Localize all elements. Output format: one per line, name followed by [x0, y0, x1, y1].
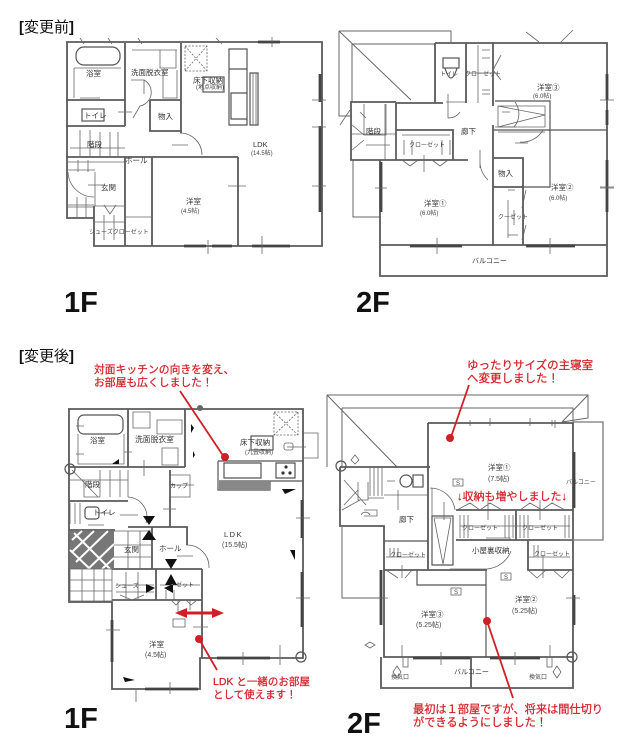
floor plan: after 1F: ーゼット — [170, 581, 194, 589]
floor plan: before 2F: クローゼット — [465, 70, 501, 78]
stairs — [342, 467, 384, 516]
floor plan: after 2F: 廊下 — [399, 514, 414, 524]
floor plan: after 1F: 階段 — [85, 479, 100, 489]
closets — [386, 500, 570, 578]
bath fittings — [74, 50, 177, 98]
closets — [402, 45, 545, 240]
floor plan: before 2F: バルコニー — [472, 257, 507, 265]
floor plan: before 1F: (14.5帖) — [251, 149, 273, 157]
walls — [68, 409, 303, 689]
floor label: before 2F: 2F — [356, 287, 390, 319]
hatched entry — [70, 531, 114, 569]
floor plan: after 2F: クローゼット — [390, 551, 426, 559]
floor plan: before 1F: 洋室 — [186, 196, 201, 206]
floor plan: before 2F: (6.0帖) — [420, 209, 438, 217]
stairs — [68, 130, 125, 218]
callout: master bedroom: へ変更しました！ — [467, 372, 559, 385]
walls — [66, 42, 322, 246]
floor plan: after 2F: 洋室② — [515, 594, 538, 604]
floor plan: after 2F: 小屋裏収納 — [472, 545, 510, 555]
callout: kitchen: 対面キッチンの向きを変え、 — [94, 362, 234, 376]
callout: master bedroom — [446, 358, 593, 442]
toilet — [82, 109, 104, 121]
closets — [116, 475, 200, 612]
doors — [68, 80, 202, 197]
under-floor storage — [185, 46, 207, 71]
windows — [184, 42, 320, 246]
floor plan: after 2F: 換気口 — [391, 673, 409, 681]
floor plan: after 1F: ホール — [159, 544, 182, 553]
floor plan: after 2F: バルコニー — [454, 668, 489, 676]
callout: LDK room: として使えます！ — [213, 688, 297, 701]
floor plan: after 2F: クローゼット — [534, 550, 570, 558]
floor plan: after 2F: S — [456, 481, 460, 487]
floor plan: before 1F: 洗面脱衣室 — [131, 67, 169, 77]
windows — [381, 452, 574, 658]
floor plan: before 1F: 玄関 — [101, 182, 116, 192]
kitchen counter — [229, 49, 258, 125]
heading: after: [変更後] — [19, 348, 74, 365]
callout: storage: ↓収納も増やしました↓ — [457, 489, 567, 503]
floor plan: before 2F: クローゼット — [409, 141, 445, 149]
floor plan: before 1F: ホール — [125, 156, 148, 165]
room labels: 洋室③ — [537, 82, 560, 92]
floor plan: before 2F: (6.0帖) — [549, 194, 567, 202]
floor plan: after 1F: カップ — [170, 483, 188, 490]
callout: partition — [413, 617, 603, 729]
toilet — [400, 475, 412, 487]
sink counter — [218, 461, 303, 490]
walls — [351, 43, 607, 276]
outside bump — [287, 433, 318, 458]
doors — [120, 497, 209, 568]
floor plan: after 1F: 玄関 — [124, 544, 139, 554]
callout: partition: ができるようにしました！ — [413, 715, 547, 729]
floor plan: before 2F — [339, 30, 614, 276]
floor plan: before 2F: 階段 — [366, 126, 381, 136]
floor label: before 1F: 1F — [64, 287, 98, 319]
floor plan: before 1F: LDK — [253, 140, 268, 149]
floor plan: before 1F: トイレ — [84, 111, 106, 120]
black triangle markers — [112, 424, 296, 682]
floor plan: after 1F: 洋室 — [149, 639, 164, 649]
windows — [112, 500, 302, 689]
wash and bath fittings — [78, 415, 123, 434]
floor plan: after 1F: (15.5帖) — [222, 540, 247, 549]
room labels: 洋室① — [488, 462, 511, 472]
toilet — [443, 58, 459, 68]
floor plan: after 1F: (九畳収納) — [245, 448, 273, 456]
floor plan: after 2F: (5.25帖) — [512, 606, 537, 615]
roof lines — [339, 31, 451, 217]
floor plan: after 2F: 洋室③ — [421, 609, 444, 619]
floor plan: after 1F: トイレ — [93, 508, 116, 517]
floor plan: after 2F — [327, 395, 603, 688]
floor plan: after 1F: (4.5帖) — [145, 650, 166, 659]
floor plan: after 2F: クローゼット — [522, 524, 558, 532]
floor plan: after 1F: シューズ — [115, 582, 139, 590]
floor plan: after 2F: (5.25帖) — [416, 620, 441, 629]
arrow: double-headed — [175, 608, 224, 618]
floor plan: before 2F: 洋室② — [551, 182, 574, 192]
floor plan: before 1F: シューズクローゼット — [89, 228, 149, 236]
room labels: 浴室 — [86, 68, 101, 78]
floor plan: after 2F: 換気口 — [529, 673, 547, 681]
floor plan: after 2F: (7.5帖) — [488, 474, 509, 483]
floor plan: before 1F — [66, 37, 326, 254]
floor plan: before 1F: 床下収納 — [193, 75, 223, 85]
under-floor storage — [274, 412, 298, 435]
floor plan: after 2F: バルコニー — [566, 479, 596, 486]
heading: before: [変更前] — [19, 19, 74, 36]
floor plan: before 2F: トイレ — [440, 72, 458, 78]
windows — [381, 74, 607, 246]
doors — [430, 488, 511, 569]
callout: LDK room — [195, 635, 310, 701]
floor plan: after 1F: 床下収納 — [240, 437, 270, 447]
floor plan: before 2F: 洋室① — [424, 198, 447, 208]
floor plan: before 1F: 物入 — [158, 111, 173, 121]
floor label: after 2F: 2F — [347, 708, 381, 740]
S boxes — [453, 479, 463, 486]
callout: kitchen: お部屋も広くしました！ — [94, 376, 213, 389]
floor plan: before 1F: 階段 — [87, 139, 102, 149]
floor plan: before 1F: (4.5帖) — [181, 207, 199, 215]
entry tiles — [70, 531, 152, 601]
callout: master bedroom: ゆったりサイズの主寝室 — [467, 358, 593, 372]
floor plan: before 2F: 廊下 — [461, 126, 476, 136]
floor plan: after 2F: S — [504, 575, 508, 581]
stairs — [68, 470, 128, 497]
column circles — [65, 464, 75, 474]
floor plan: before 1F: (地点収納) — [196, 83, 224, 91]
floor plan: after 2F: S — [454, 590, 458, 596]
void with X — [432, 516, 453, 565]
floor plan: after 1F: 洗面脱衣室 — [135, 434, 174, 444]
closet shelf — [94, 205, 152, 240]
room labels: 浴室 — [90, 435, 105, 445]
roof lines — [327, 395, 588, 598]
bathtub — [76, 47, 120, 65]
callout: kitchen — [94, 362, 234, 461]
floor plan: before 2F: 物入 — [498, 168, 513, 178]
floor plan: before 2F: クーゼット — [498, 213, 528, 221]
walls — [340, 423, 573, 688]
floor plan: after 1F — [65, 405, 318, 702]
floor label: after 1F: 1F — [64, 703, 98, 735]
vents and columns — [336, 461, 346, 471]
floor plan: before 2F: (6.0帖) — [533, 92, 551, 100]
S box — [173, 619, 185, 627]
callout: LDK room: LDK と一緒のお部屋 — [213, 675, 310, 688]
floor plan: after 1F: LDK — [224, 530, 243, 539]
toilet — [85, 507, 99, 519]
callout: partition: 最初は１部屋ですが、将来は間仕切り — [413, 702, 603, 716]
doors — [446, 94, 543, 180]
floor plan: after 2F: クローゼット — [462, 524, 498, 532]
upper balcony — [560, 422, 603, 540]
stairs — [351, 104, 396, 160]
